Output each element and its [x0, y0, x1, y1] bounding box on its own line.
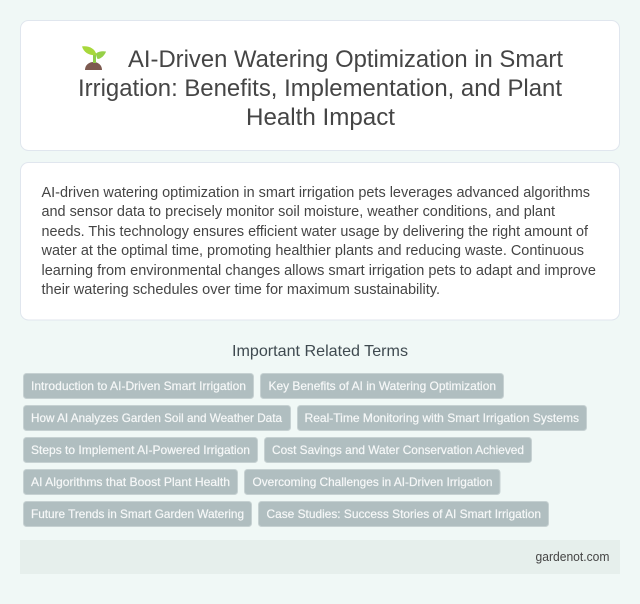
description text: water at the optimal time, promoting healthier plants and reducing waste. Continuous [40, 243, 584, 259]
tag: introduction: Introduction to AI-Driven Smart Irrigation [31, 379, 246, 393]
tag: case studies: Case Studies: Success Stories of AI Smart Irrigation [266, 507, 541, 521]
title: AI-Driven Watering Optimization in Smart [128, 46, 563, 73]
tag: cost savings: Cost Savings and Water Conservation Achieved [272, 443, 524, 457]
panel: title card [20, 20, 620, 150]
tag: real-time monitoring: Real-Time Monitoring with Smart Irrigation Systems [304, 411, 579, 425]
title: Health Impact [246, 104, 395, 131]
tag: overcoming challenges [244, 470, 500, 494]
description text: their watering schedules over time for maximum sustainability. [42, 282, 440, 298]
tag: overcoming challenges: Overcoming Challenges in AI-Driven Irrigation [252, 475, 492, 489]
tag: future trends [24, 502, 252, 526]
title: Irrigation: Benefits, Implementation, and Plant [78, 75, 562, 102]
title [78, 46, 563, 131]
tag: future trends: Future Trends in Smart Garden Watering [31, 507, 244, 521]
description text: learning from environmental changes allows smart irrigation pets to adapt and improve [42, 263, 596, 279]
tag: introduction [24, 374, 254, 398]
tag: real-time monitoring [298, 406, 586, 430]
panel: description card [20, 162, 620, 320]
tag list [24, 374, 586, 526]
description text: needs. This technology ensures efficient water usage by delivering the right amount of [42, 224, 589, 240]
tag: how AI analyzes: How AI Analyzes Garden Soil and Weather Data [31, 411, 282, 425]
description text: and sensor data to precisely monitor soil moisture, weather conditions, and plant [42, 204, 555, 220]
footer: gardenot.com [536, 550, 610, 564]
tag: steps to implement [24, 438, 258, 462]
heading: important related terms: Important Related Terms [232, 343, 408, 360]
tag: AI algorithms: AI Algorithms that Boost Plant Health [31, 475, 230, 489]
tag: how AI analyzes [24, 406, 290, 430]
tag: AI algorithms [24, 470, 238, 494]
icon: seedling [82, 46, 106, 70]
description text [40, 185, 596, 298]
description text: AI-driven watering optimization in smart irrigation pets leverages advanced algorithms [42, 185, 590, 201]
tag: key benefits [260, 374, 504, 398]
tag: case studies [258, 502, 548, 526]
tag: steps to implement: Steps to Implement AI-Powered Irrigation [31, 443, 250, 457]
tag: key benefits: Key Benefits of AI in Watering Optimization [268, 379, 496, 393]
footer [20, 540, 620, 574]
tag: cost savings [264, 438, 532, 462]
